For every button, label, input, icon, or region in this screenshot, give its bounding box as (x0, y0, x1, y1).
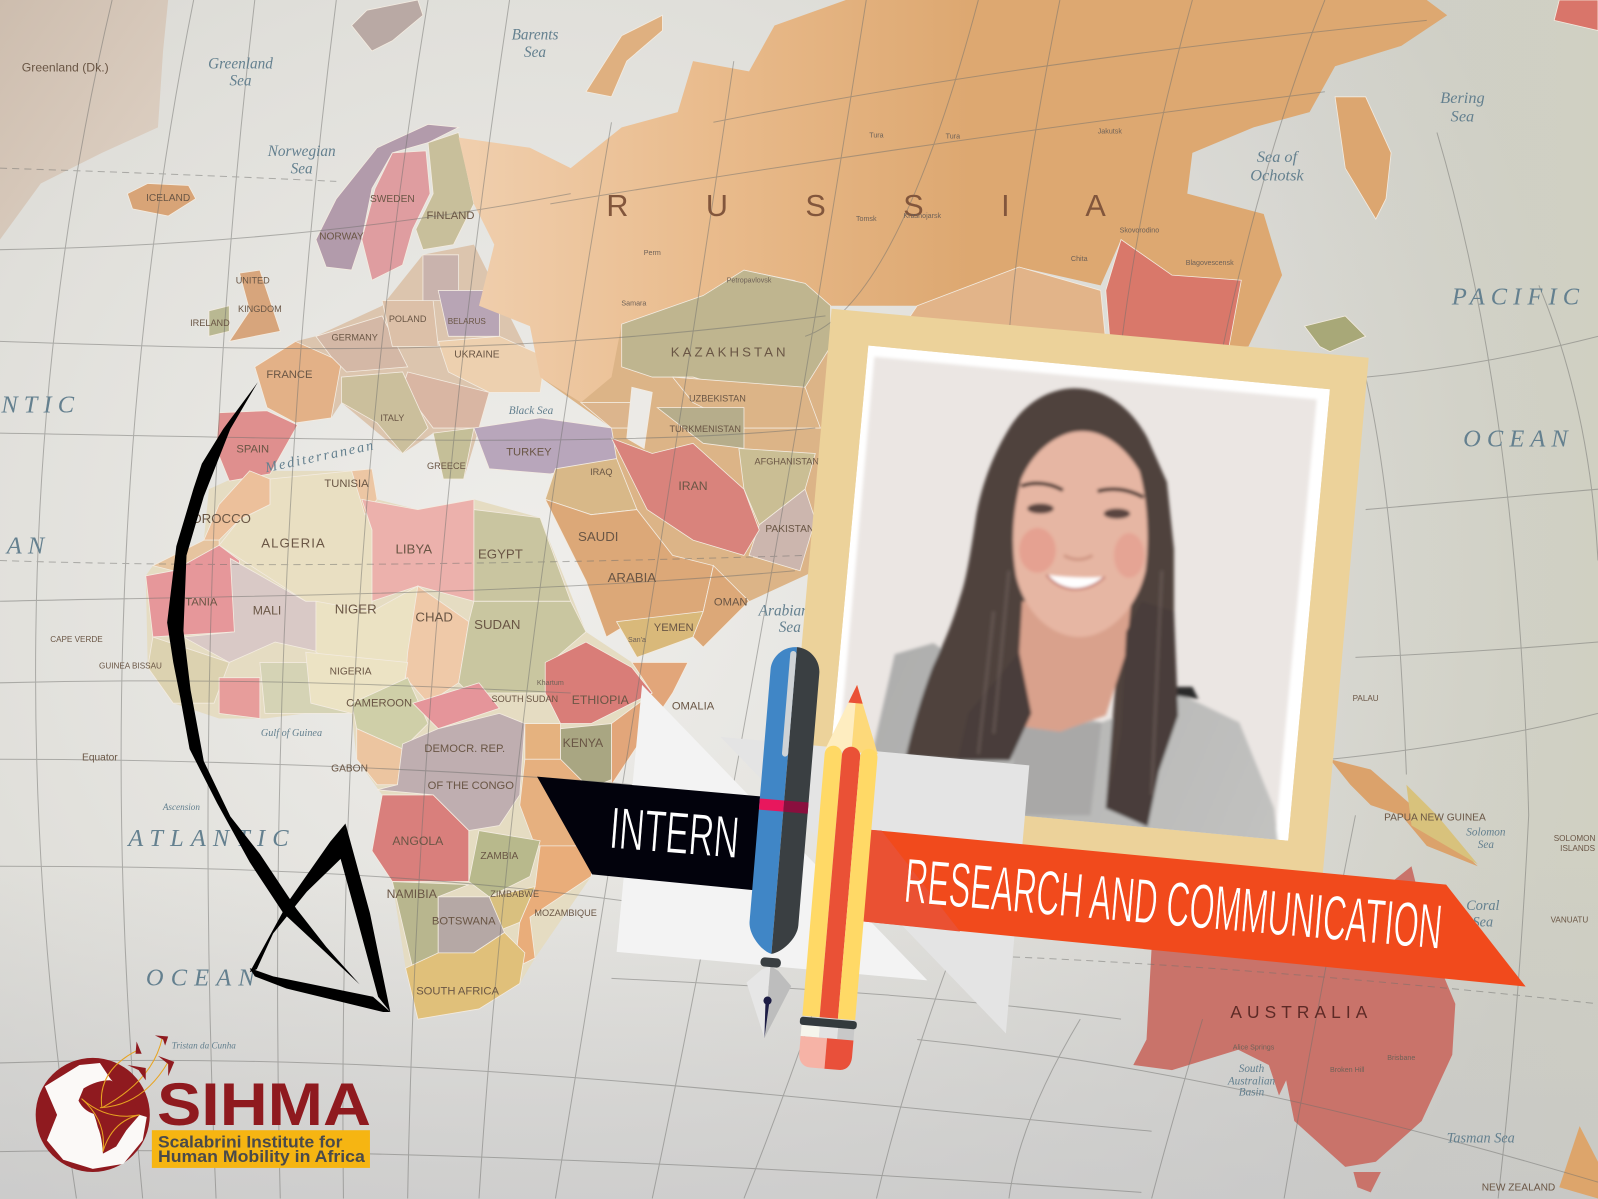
city labels: Tura (946, 133, 960, 141)
city labels: Khartum (537, 679, 564, 687)
city labels: Tura (869, 132, 884, 140)
country labels: ICELAND (146, 193, 190, 204)
country labels: IRELAND (190, 318, 230, 328)
logo tagline: Scalabrini Institute for (158, 1134, 343, 1152)
country labels: GABON (331, 763, 368, 774)
banner: intern (537, 777, 766, 891)
icon: pencil (796, 682, 886, 1071)
sea labels: Sea of (1257, 147, 1300, 166)
country labels: MALI (253, 604, 281, 618)
country labels: ARABIA (608, 570, 656, 585)
country labels: SUDAN (474, 617, 521, 632)
photo frame (786, 309, 1369, 873)
country labels: ETHIOPIA (572, 693, 630, 707)
city labels: Samara (621, 300, 646, 308)
logo globe (36, 1035, 174, 1172)
sea labels: Arabian (758, 603, 809, 620)
flag: white back (617, 685, 927, 980)
country labels: OMAN (714, 596, 748, 608)
sea labels: Australian (1227, 1075, 1276, 1087)
country labels: ZAMBIA (480, 851, 519, 862)
country labels: UZBEKISTAN (689, 394, 746, 404)
sweater (866, 643, 1278, 846)
country labels: SPAIN (236, 443, 269, 455)
sea labels: Black Sea (509, 405, 554, 417)
city labels: Krasnojarsk (904, 212, 942, 220)
sea labels: South (1239, 1063, 1265, 1075)
Asia countries (474, 0, 1598, 657)
hair front strands (1008, 653, 1033, 760)
icon: fountain pen (740, 645, 821, 1040)
logo tagline (152, 1130, 370, 1168)
arrow shaft (167, 382, 360, 984)
sea labels: Sea (291, 160, 313, 177)
country labels: UNITED (236, 275, 270, 285)
country labels: RITANIA (174, 596, 218, 608)
country labels: TURKEY (506, 447, 552, 459)
sea labels: Sea (1473, 914, 1493, 930)
arrow: brush stroke (167, 382, 390, 1012)
country labels: AUSTRALIA (1230, 1002, 1372, 1022)
sea labels: Sea (524, 44, 546, 61)
intern label: INTERN (607, 794, 742, 871)
country labels: CAPE VERDE (50, 635, 103, 644)
country labels: VANUATU (1551, 915, 1588, 924)
country labels: TURKMENISTAN (669, 424, 741, 434)
banner: research and communication (861, 830, 1526, 987)
sea labels: Ascension (162, 802, 200, 812)
country labels: SAUDI (578, 529, 618, 544)
country labels: ZIMBABWE (490, 889, 539, 899)
country labels: IRAN (678, 479, 708, 493)
Greenland (0, 0, 168, 239)
sea labels: Basin (1239, 1087, 1265, 1099)
sea labels: OCEAN (1463, 425, 1574, 452)
Russia (459, 0, 1447, 403)
country labels: UKRAINE (454, 350, 500, 361)
country labels: PALAU (1353, 694, 1379, 703)
sea labels: Coral (1466, 898, 1499, 914)
sea labels: PACIFIC (1451, 284, 1585, 311)
country labels: YEMEN (654, 622, 694, 634)
city labels (537, 128, 1415, 1074)
country labels: KINGDOM (238, 304, 282, 314)
country labels: CHAD (415, 610, 453, 625)
eyes (1027, 503, 1054, 514)
country labels: NIGER (335, 602, 377, 617)
city labels: Chita (1071, 255, 1088, 263)
sea labels: Mediterranean (263, 437, 377, 476)
nose (1064, 555, 1093, 559)
country labels: OF THE CONGO (428, 780, 514, 792)
country labels: FRANCE (266, 369, 312, 381)
sea labels: Solomon (1466, 827, 1506, 839)
Oceania (1133, 759, 1598, 1198)
flag: grey back (721, 737, 1029, 1033)
country labels: ISLANDS (1560, 844, 1596, 853)
sea labels: Tristan da Cunha (172, 1041, 236, 1051)
country labels: BELARUS (448, 317, 486, 326)
logo tagline: Human Mobility in Africa (158, 1148, 366, 1166)
city labels: Tomsk (856, 215, 877, 223)
sea labels: ATLANTIC (126, 825, 296, 852)
sea labels: Bering (1440, 88, 1485, 107)
country labels: EGYPT (478, 546, 523, 561)
country labels: AFGHANISTAN (755, 457, 819, 467)
logo wordmark: SIHMA (157, 1071, 371, 1138)
sea labels: AN (5, 532, 50, 559)
country labels: IRAQ (590, 467, 612, 477)
hair back (906, 388, 1178, 827)
arrow head bottom stroke (250, 968, 390, 1012)
country labels: NIGERIA (330, 667, 372, 678)
neck (1015, 601, 1131, 732)
country labels: GREECE (427, 461, 466, 471)
country labels: R U S S I A (606, 189, 1106, 223)
city labels: Broken Hill (1330, 1066, 1365, 1074)
arrow head left stroke (250, 823, 345, 972)
Continent bases (146, 245, 831, 1019)
city labels: Perm (644, 249, 661, 257)
logo: SIHMA (36, 1035, 371, 1172)
country labels: PAPUA NEW GUINEA (1384, 812, 1486, 823)
sea labels: Sea (229, 73, 252, 90)
country labels: ANGOLA (392, 834, 444, 848)
country labels: PAKISTAN (765, 524, 814, 535)
sea labels: Sea (1478, 839, 1494, 851)
city labels: Brisbane (1387, 1054, 1415, 1062)
sea labels: Barents (512, 27, 559, 44)
country labels: POLAND (389, 314, 427, 324)
city labels: Blagovescensk (1186, 259, 1234, 267)
smile (1047, 575, 1105, 589)
country labels: DEMOCR. REP. (424, 743, 505, 755)
country labels: GERMANY (332, 332, 378, 342)
country labels: OMALIA (672, 700, 715, 712)
country labels: NEW ZEALAND (1482, 1182, 1555, 1193)
country labels: FINLAND (426, 210, 474, 222)
city labels: Skovorodino (1120, 226, 1159, 234)
photo (827, 345, 1330, 846)
city labels: Petropavlovsk (727, 276, 772, 284)
sea labels: OCEAN (146, 964, 262, 991)
country labels: SOUTH AFRICA (416, 986, 500, 998)
sea labels: NTIC (0, 392, 80, 419)
country labels: Greenland (Dk.) (22, 60, 109, 74)
country labels: NAMIBIA (387, 887, 438, 901)
sea labels: Sea (779, 619, 801, 636)
sea labels: Sea (1451, 106, 1474, 125)
country labels: CAMEROON (346, 697, 412, 709)
city labels: Alice Springs (1233, 1044, 1275, 1052)
city labels: San'a (628, 636, 646, 644)
country labels: TUNISIA (324, 478, 369, 490)
country labels: SWEDEN (370, 194, 415, 205)
face (1013, 431, 1148, 637)
sea labels: Norwegian (267, 143, 336, 160)
eyebrows (1021, 483, 1143, 497)
country labels: MOZAMBIQUE (534, 908, 597, 918)
country labels: Equator (82, 752, 118, 763)
country labels: SOUTH SUDAN (492, 694, 558, 704)
sea labels: Gulf of Guinea (261, 728, 322, 739)
sea labels: Greenland (208, 55, 273, 72)
sea labels: Ochotsk (1250, 165, 1304, 184)
country labels: OROCCO (191, 511, 251, 526)
country labels: KENYA (563, 736, 604, 750)
city labels: Jakutsk (1098, 128, 1122, 136)
country labels: NORWAY (319, 231, 364, 242)
country labels: BOTSWANA (432, 915, 496, 927)
country labels: KAZAKHSTAN (671, 345, 789, 360)
country labels: LIBYA (395, 541, 432, 556)
country labels: ALGERIA (261, 535, 326, 550)
Africa countries (146, 469, 688, 1019)
country labels: SOLOMON (1554, 834, 1595, 843)
country labels: GUINEA BISSAU (99, 662, 162, 671)
country labels: ITALY (380, 413, 404, 423)
arrow head right stroke (340, 823, 390, 1012)
Europe countries (127, 0, 662, 481)
sea labels: Tasman Sea (1447, 1130, 1515, 1146)
